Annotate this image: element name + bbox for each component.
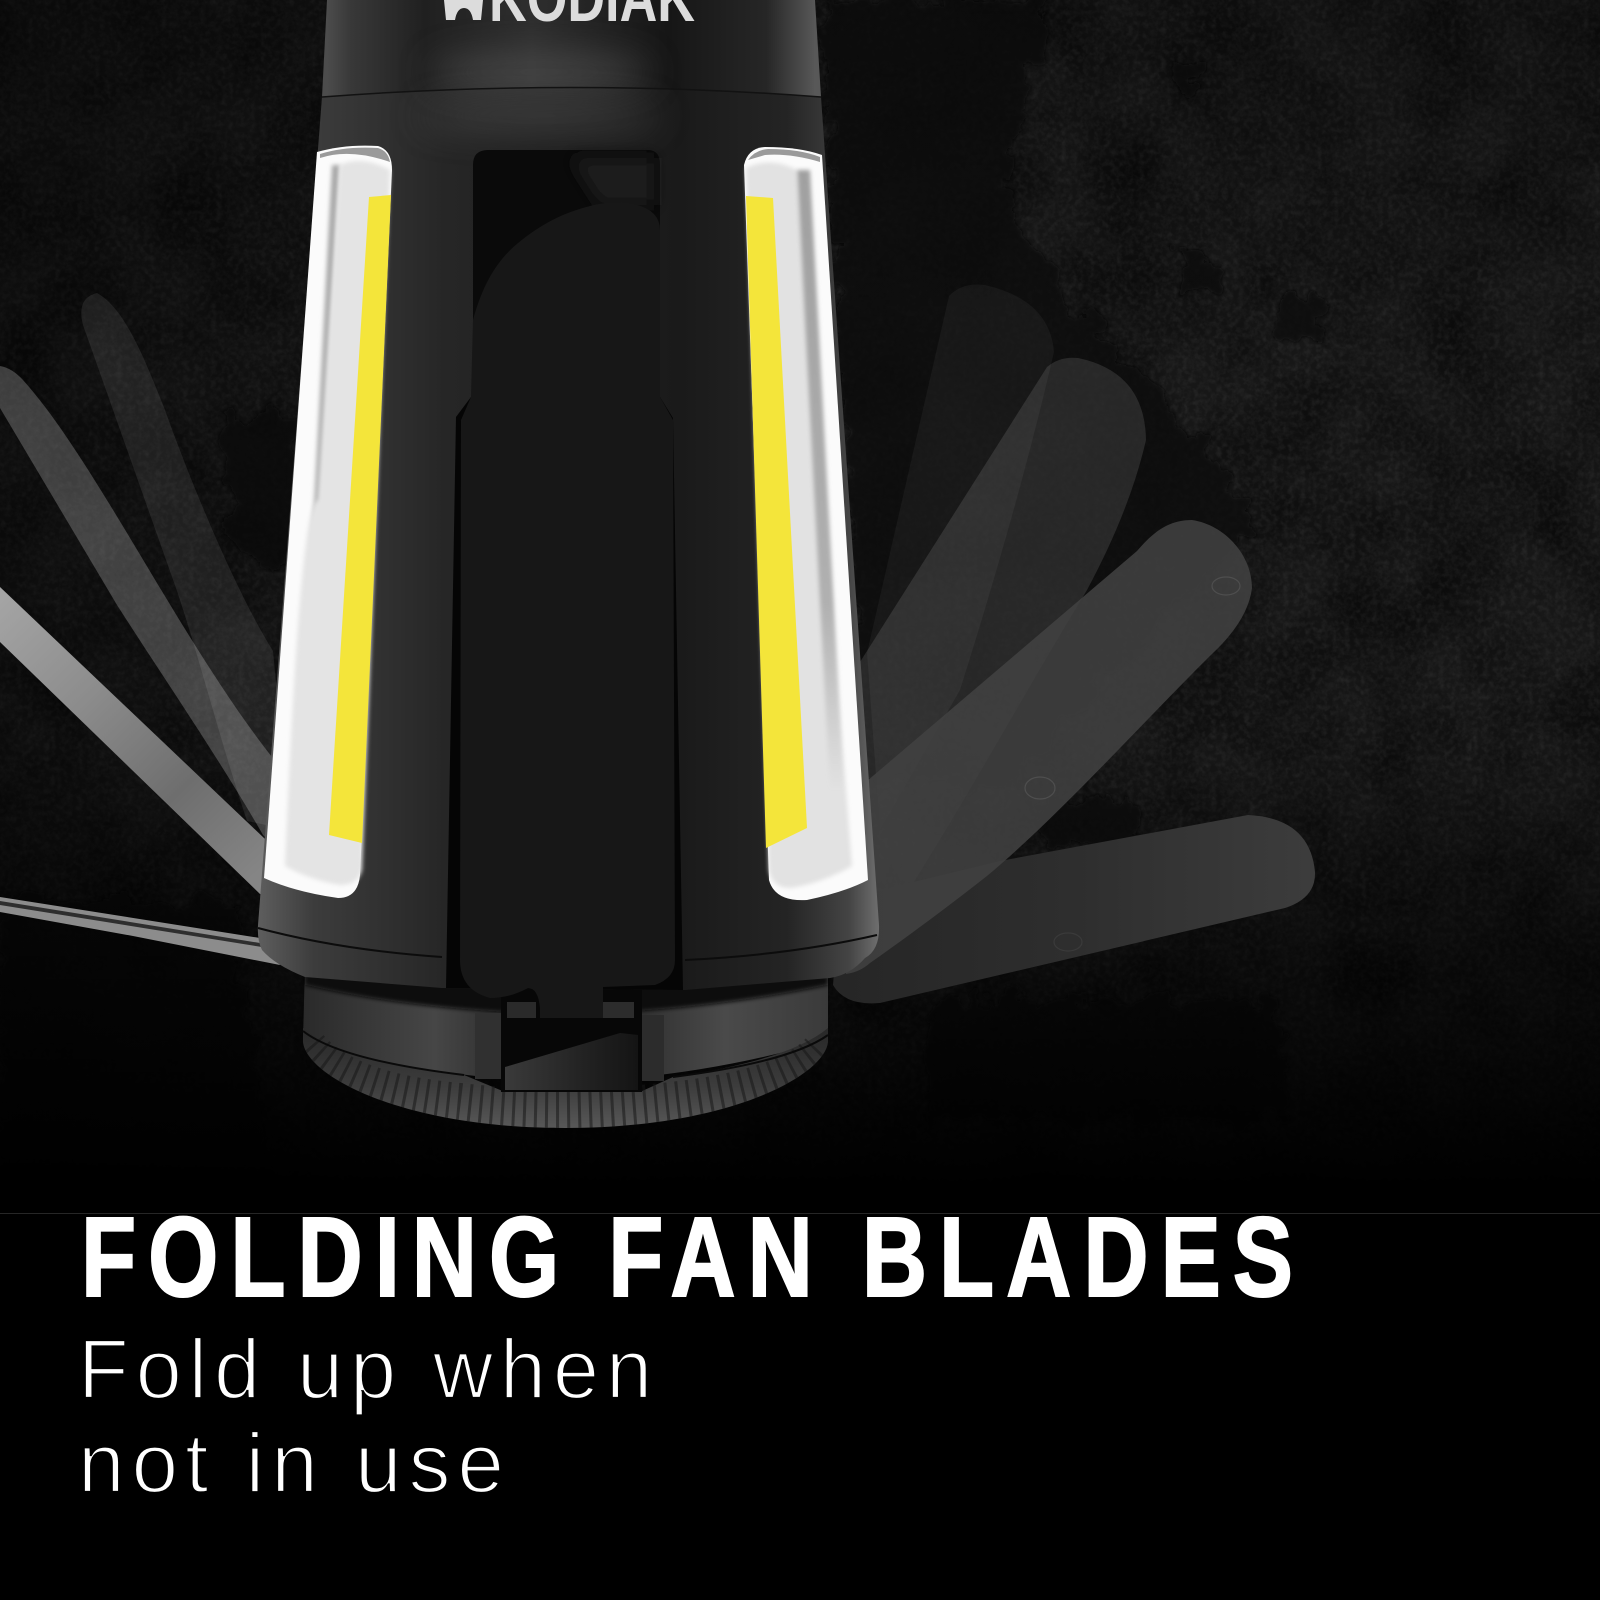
ring seam xyxy=(303,1031,828,1077)
upper cap xyxy=(322,0,821,97)
right latch block xyxy=(603,1002,634,1018)
right blade: lowest position xyxy=(833,815,1315,1003)
left latch block xyxy=(507,1002,536,1018)
fan blades on the left xyxy=(0,293,290,965)
centre notch xyxy=(501,985,642,1092)
left clip post xyxy=(475,1013,501,1079)
lens top rim xyxy=(320,148,390,162)
shadow under body xyxy=(305,965,828,1014)
cap highlight xyxy=(430,54,650,90)
lens grey strip xyxy=(299,165,340,780)
left blade: edge-on position xyxy=(0,897,280,965)
blade recess xyxy=(473,150,660,400)
recess side slots xyxy=(446,397,683,990)
damaged wall patch xyxy=(0,0,1324,1210)
fan blades on the right xyxy=(833,284,1315,1003)
lens diffuser xyxy=(746,162,852,888)
subheading: not in use xyxy=(78,1416,511,1510)
recess highlight xyxy=(570,158,654,205)
knurled ring xyxy=(303,1028,828,1128)
lens diffuser xyxy=(285,161,390,885)
right blade: second position xyxy=(846,520,1252,974)
locking wedge xyxy=(505,1033,638,1090)
shoulder highlight xyxy=(420,104,660,128)
lower housing seam xyxy=(258,928,877,960)
base cylinder xyxy=(303,965,828,1082)
left blade: third position xyxy=(0,587,275,900)
brand logo xyxy=(444,0,695,36)
lantern body xyxy=(258,0,879,990)
cap seam xyxy=(322,88,821,97)
ring ridges xyxy=(306,1050,826,1112)
lens top rim xyxy=(748,149,820,162)
right light panel xyxy=(744,147,868,900)
lower housing xyxy=(258,88,879,990)
left blade: second position xyxy=(0,366,290,860)
folded blade xyxy=(460,202,675,1018)
blade pivot marks xyxy=(1025,577,1240,951)
right blade: faintest position xyxy=(867,284,1054,830)
heading: FOLDING FAN BLADES xyxy=(81,1194,1305,1320)
left blade: faintest position xyxy=(81,293,290,830)
left light panel xyxy=(264,146,392,898)
subheading: Fold up when xyxy=(78,1322,659,1416)
logo bear icon xyxy=(444,0,483,20)
lens xyxy=(744,147,868,900)
yellow LED strip xyxy=(329,195,391,843)
lens grey strip xyxy=(797,170,844,790)
lantern base xyxy=(303,965,828,1128)
right clip post xyxy=(642,1015,664,1081)
yellow LED strip xyxy=(746,196,807,848)
horizontal divider xyxy=(0,1213,1600,1214)
lens xyxy=(264,146,392,898)
right blade: third position xyxy=(860,358,1146,939)
centre channel and folded blade xyxy=(446,150,683,1018)
